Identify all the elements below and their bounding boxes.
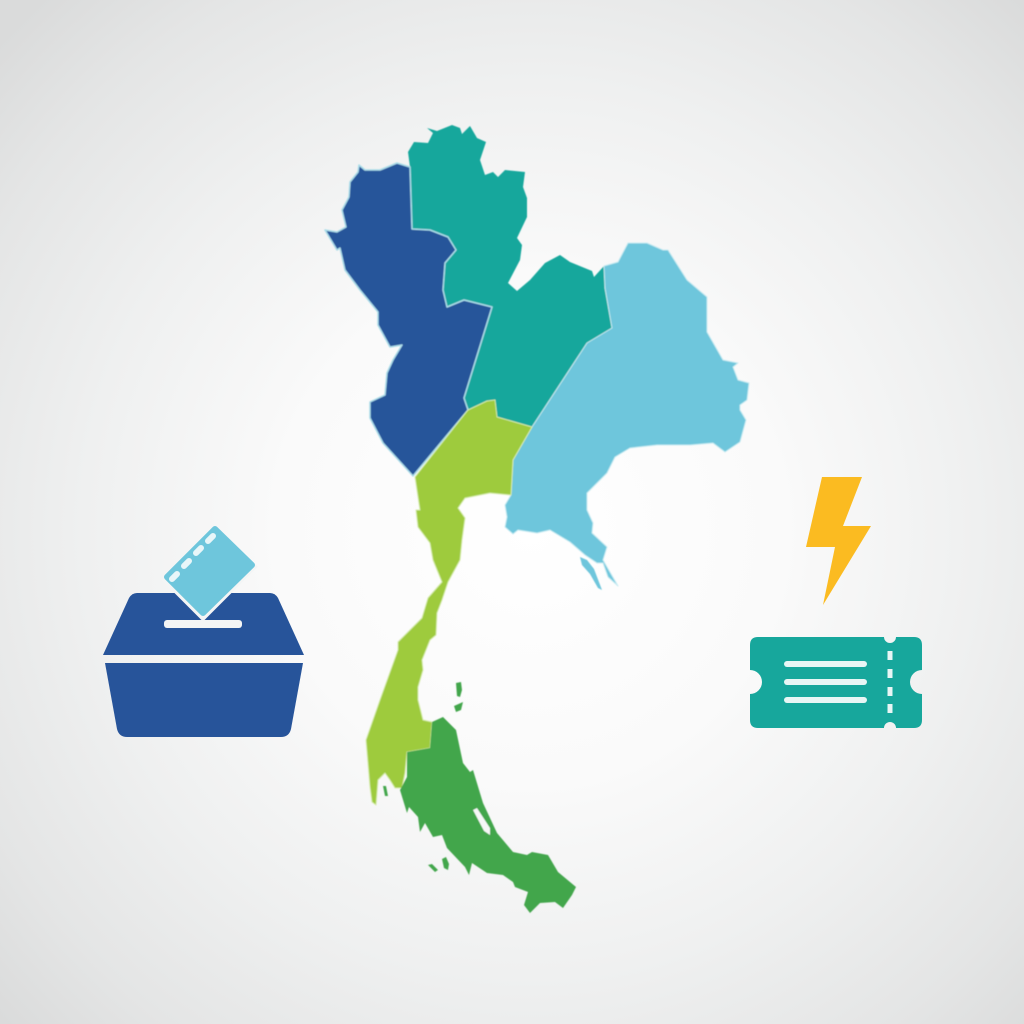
box lid <box>103 593 304 655</box>
region: deep south green <box>400 717 576 913</box>
islands: southern green <box>383 682 463 872</box>
icon: ticket <box>750 637 922 728</box>
icon: lightning bolt <box>806 477 871 605</box>
ballot paper <box>163 529 256 618</box>
region: north teal <box>408 125 612 427</box>
region: central and upper south lime <box>366 400 532 805</box>
lake in the south <box>473 808 490 835</box>
icon: ballot box <box>103 529 304 737</box>
map of Thailand <box>325 125 749 913</box>
region: northwest blue <box>325 163 492 476</box>
ballot slot <box>164 620 242 628</box>
island: light blue strip <box>580 557 602 590</box>
box base <box>105 663 303 737</box>
region: northeast light blue <box>505 243 749 586</box>
